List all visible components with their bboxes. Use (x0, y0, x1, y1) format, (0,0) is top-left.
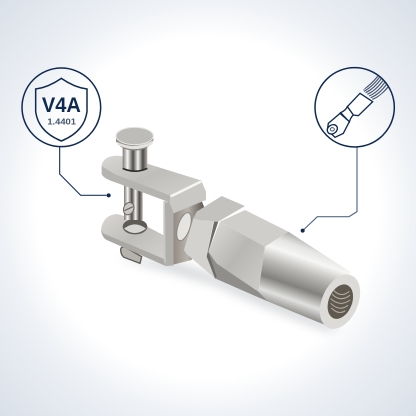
bore (326, 124, 338, 135)
upper fork plate (102, 156, 202, 202)
callout: wire rope terminal (301, 68, 394, 233)
product: shadow (117, 258, 340, 332)
leader line left (60, 147, 107, 195)
badge circle (22, 68, 101, 147)
leader dot left (107, 193, 111, 197)
product: clevis terminal (101, 127, 207, 266)
tapered sleeve (258, 232, 350, 328)
label: 1.4401: 1.4401 (47, 116, 76, 126)
callout: material V4A (22, 68, 111, 197)
upper pin section (123, 144, 147, 171)
pin head (116, 127, 153, 151)
label: V4A: V4A (42, 94, 81, 117)
body hex lower face (208, 252, 268, 302)
waist (341, 107, 353, 122)
web of the fork (163, 182, 206, 266)
sleeve (347, 93, 373, 116)
badge circle right (315, 68, 394, 147)
body hex front face (208, 222, 265, 292)
clip under lower plate (121, 247, 142, 263)
body hex top face (220, 210, 288, 247)
fork hole (123, 219, 147, 234)
hex end (327, 113, 349, 137)
swivel neck (172, 197, 207, 265)
leader line right (303, 147, 357, 230)
icon: swaged cable end (326, 76, 388, 138)
wire strands (362, 76, 388, 100)
cross screw (121, 201, 136, 217)
product: hex body and cone (184, 196, 368, 335)
lower pin section (124, 183, 143, 220)
leader dot right (301, 229, 305, 233)
sleeve end face (312, 268, 368, 335)
icon: shield (36, 78, 87, 141)
lower fork plate (101, 214, 173, 266)
lock nut faces (193, 196, 245, 222)
